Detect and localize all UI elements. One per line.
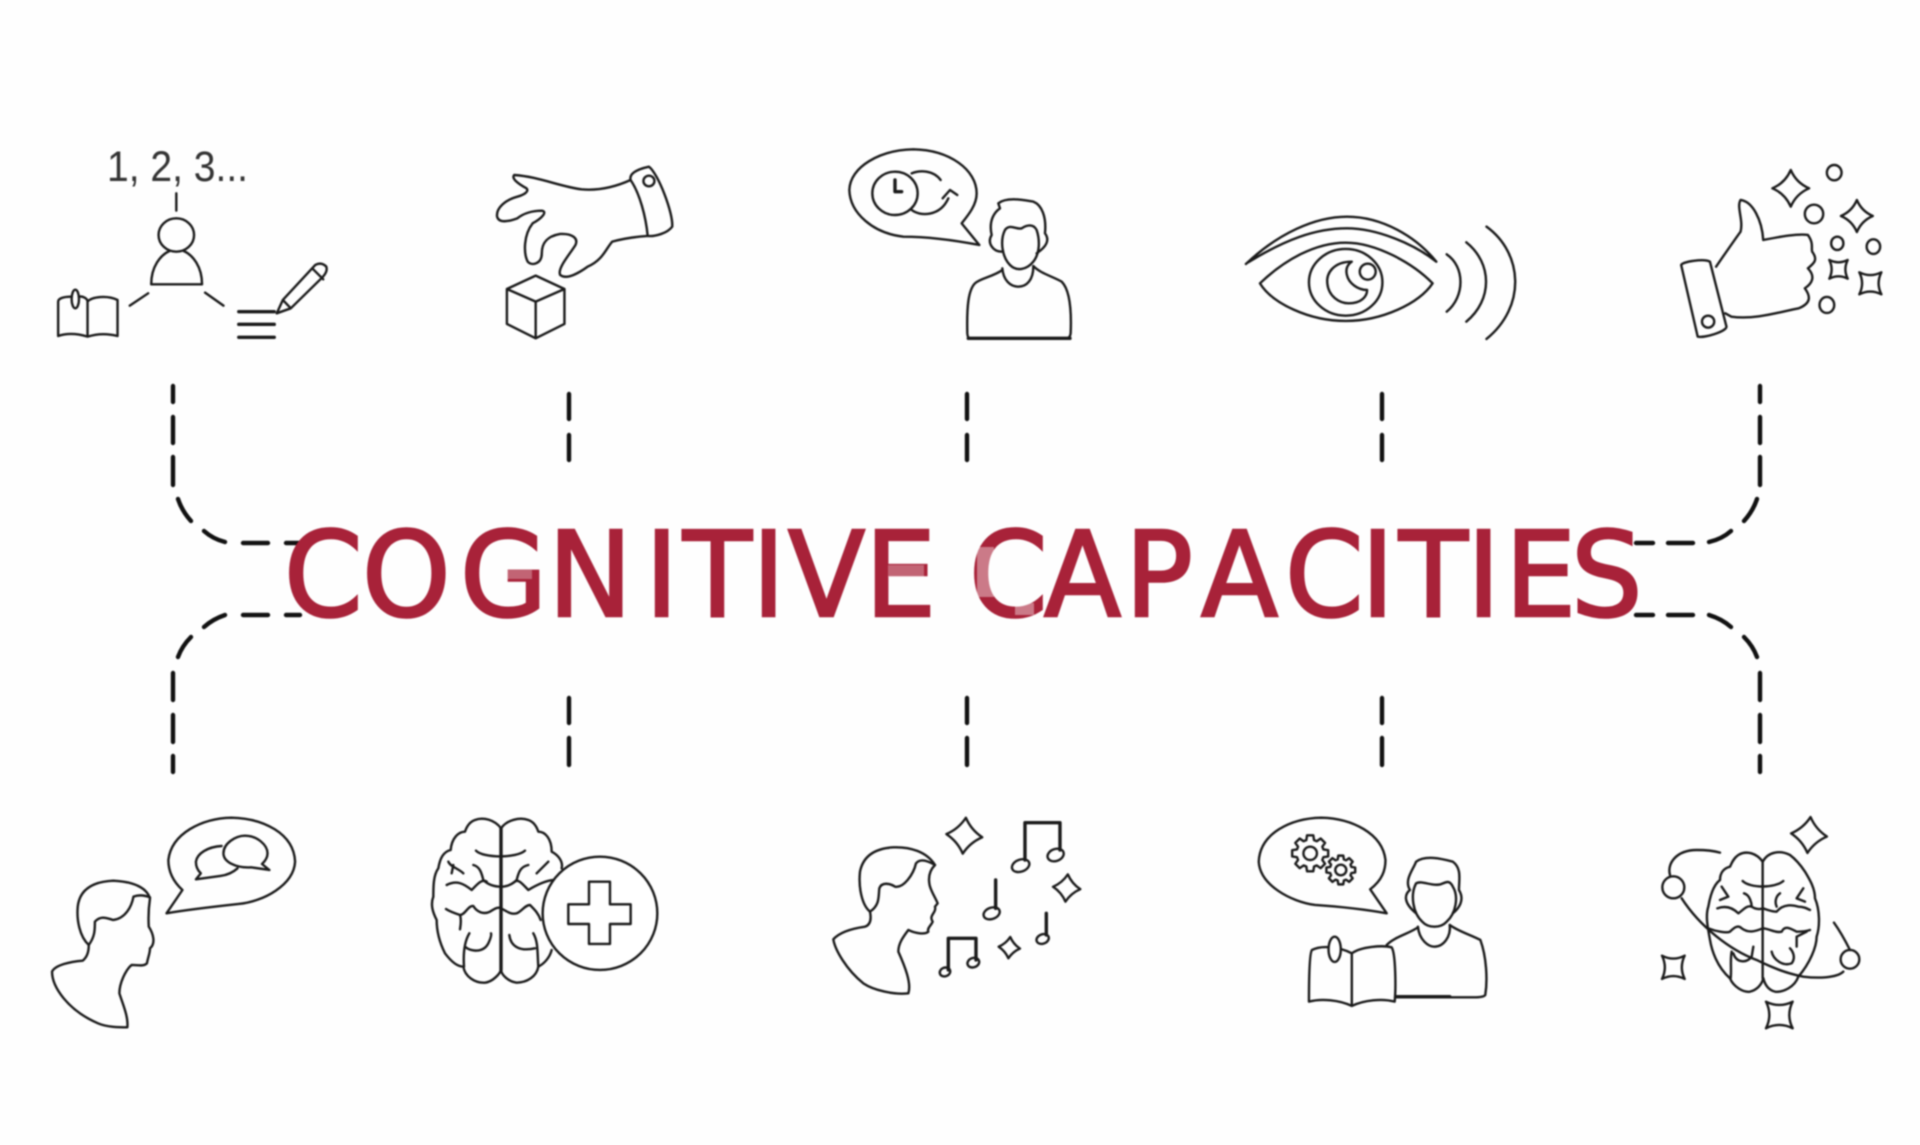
icon: person with clock speech bubble xyxy=(849,149,1071,338)
icon: brain with medical plus xyxy=(432,819,657,983)
person with book and pencil drawing xyxy=(58,193,327,337)
icon: brain with orbit and stars xyxy=(1662,815,1859,1028)
connector: bottom-right bracket xyxy=(1636,615,1760,772)
icon: reader with gears speech bubble xyxy=(1259,818,1486,1006)
icon: numbers, person, book and pencil xyxy=(58,143,327,337)
connector: bottom-left bracket xyxy=(173,615,300,772)
connector: inner top dashes xyxy=(569,394,1382,460)
icon: singing head with music notes xyxy=(833,816,1081,994)
connector: top-right bracket xyxy=(1636,386,1760,543)
icon: hand reaching for cube xyxy=(497,167,672,338)
icon: thumbs up with sparkles xyxy=(1681,165,1881,337)
numbers text: 1, 2, 3... xyxy=(107,143,248,191)
icon: eye with sound waves xyxy=(1246,217,1515,339)
connector: inner bottom dashes xyxy=(569,698,1382,765)
title: COGNITIVE CAPACITIES xyxy=(284,508,1643,645)
connector: top-left bracket xyxy=(173,386,300,543)
icon: head profile with chat bubble xyxy=(52,818,295,1027)
